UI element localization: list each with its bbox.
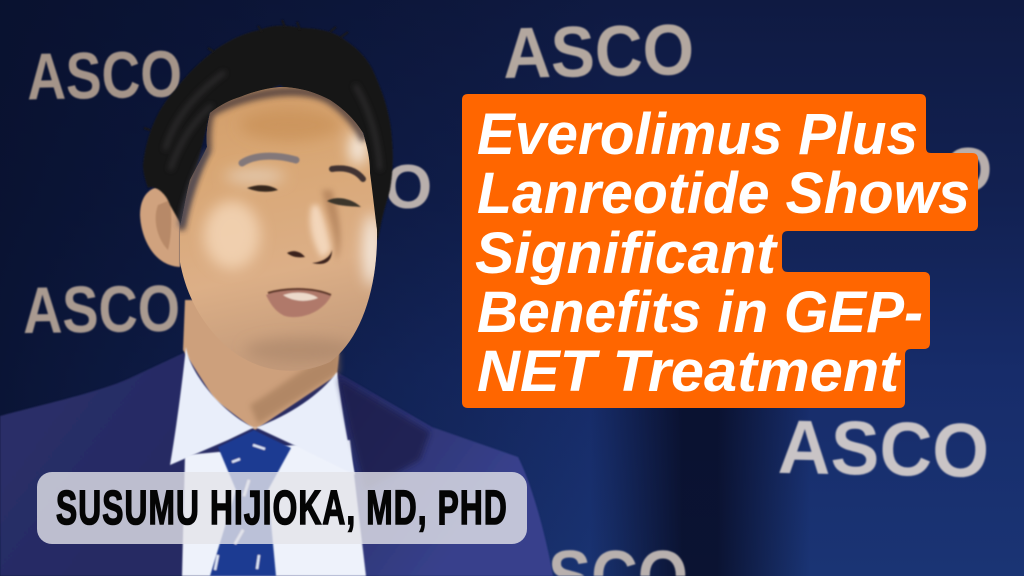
speaker portrait <box>0 20 553 576</box>
backdrop logo: cropped at bottom edge <box>551 549 686 576</box>
shirt body <box>182 440 366 576</box>
face highlights and shading <box>204 109 381 362</box>
headline panel: orange stepped highlight <box>462 94 978 408</box>
eyes <box>247 185 361 207</box>
neck shadow <box>250 350 340 424</box>
speaker name badge <box>37 472 527 544</box>
neck <box>183 300 345 430</box>
backdrop logos: ASCO repeated: ASCO <box>777 405 990 494</box>
headline text: NET Treatment <box>477 339 902 404</box>
headline text: Lanreotide Shows <box>477 161 970 226</box>
headline text: Benefits in GEP- <box>477 280 923 345</box>
eyebrows <box>242 156 363 179</box>
ear <box>140 187 180 267</box>
suit jacket <box>0 350 553 576</box>
hairline shadow <box>180 91 365 230</box>
mouth <box>266 288 331 317</box>
backdrop logos: ASCO repeated <box>22 10 992 494</box>
hair: loose strands <box>144 20 348 130</box>
headline text: Everolimus Plus <box>477 102 918 167</box>
nose <box>287 250 332 264</box>
backdrop logos: ASCO repeated: O <box>944 136 992 205</box>
hair: sheen <box>165 72 380 170</box>
temple greying <box>178 150 211 228</box>
headline text <box>475 102 970 404</box>
necktie <box>210 430 291 576</box>
backdrop logos: ASCO repeated: ASCO <box>26 36 183 114</box>
orange highlight shape <box>462 94 978 408</box>
backdrop logos: ASCO repeated: ASCO <box>502 10 695 94</box>
backdrop logos: ASCO repeated: ASCO <box>22 271 180 347</box>
nose side shadow <box>322 190 340 262</box>
lapel shadows <box>338 378 430 490</box>
backdrop logos: ASCO repeated: O <box>384 153 432 222</box>
badge background <box>37 472 527 544</box>
speaker name: SUSUMU HIJIOKA, MD, PHD <box>56 480 507 535</box>
shirt collar <box>170 347 355 475</box>
hair <box>143 20 393 240</box>
headline text: Significant <box>475 221 779 286</box>
face <box>180 87 378 370</box>
nose highlight <box>310 205 331 258</box>
